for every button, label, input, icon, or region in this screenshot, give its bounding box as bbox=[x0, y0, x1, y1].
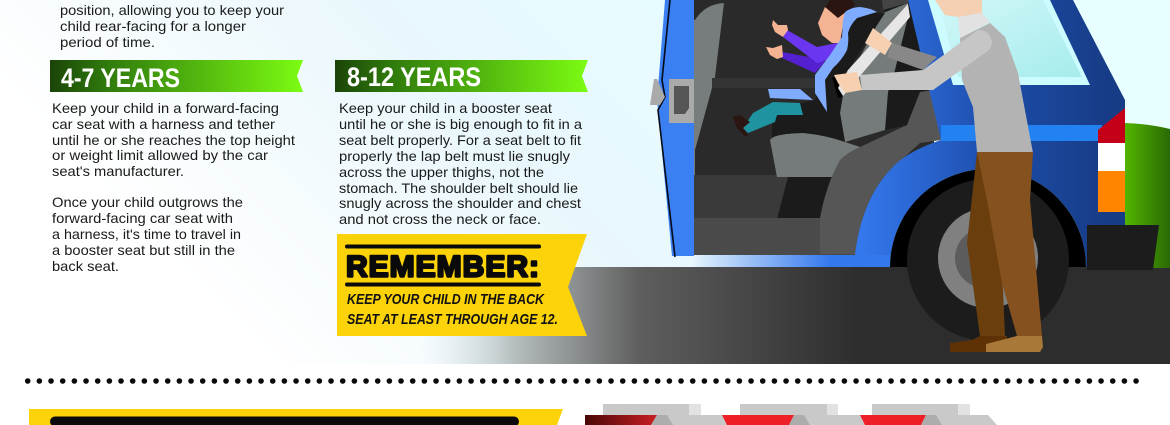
car floor bbox=[694, 175, 864, 255]
text: booster seat advice: seat belt properly. For a seat belt to fit bbox=[339, 133, 581, 148]
top text fragment: period of time. bbox=[60, 35, 155, 50]
text: forward-facing advice: Keep your child in a forward-facing bbox=[52, 101, 279, 116]
torso bbox=[960, 23, 1033, 153]
text: forward-facing advice: car seat with a harness and tether bbox=[52, 117, 275, 132]
vehicle body bbox=[585, 415, 997, 425]
top text fragment: position, allowing you to keep your bbox=[60, 3, 284, 18]
neck bbox=[935, 0, 982, 17]
text: booster seat advice: properly the lap belt must lie snugly bbox=[339, 149, 570, 164]
child bbox=[733, 0, 877, 137]
text: forward-facing advice bbox=[52, 101, 295, 179]
text: booster seat advice: until he or she is big enough to fit in a bbox=[339, 117, 582, 132]
far hand bbox=[865, 28, 892, 55]
wheel bbox=[890, 169, 1086, 341]
parent bbox=[834, 0, 1043, 352]
heading: 8-12 years bbox=[335, 60, 588, 92]
text: outgrowing the seat: back seat. bbox=[52, 259, 119, 274]
text: outgrowing the seat: forward-facing car seat with bbox=[52, 211, 233, 226]
text: booster seat advice: snugly across the shoulder and chest bbox=[339, 196, 581, 211]
top text fragment: child rear-facing for a longer bbox=[60, 19, 246, 34]
hair bbox=[825, 0, 855, 18]
illustration: parent buckling child in car bbox=[650, 0, 1170, 352]
text: forward-facing advice: seat's manufacturer. bbox=[52, 164, 184, 179]
car interior bbox=[694, 0, 934, 218]
roof racks bbox=[603, 404, 970, 415]
lap padding bbox=[768, 89, 813, 100]
door sill bbox=[694, 255, 890, 267]
interior bar bbox=[712, 78, 822, 88]
heading: 4-7 years: 4-7 YEARS bbox=[61, 63, 180, 93]
child legs bbox=[743, 102, 803, 133]
road bbox=[420, 267, 1170, 364]
seat back bbox=[840, 3, 908, 142]
interior pillar bbox=[694, 3, 724, 175]
seat cushion bbox=[770, 133, 860, 177]
grey wedges bbox=[651, 415, 942, 425]
text: forward-facing advice: until he or she reaches the top height bbox=[52, 133, 295, 148]
front shoe bbox=[986, 336, 1043, 352]
top text fragment bbox=[60, 3, 284, 50]
far arm bbox=[887, 43, 937, 70]
green bush bbox=[1125, 123, 1170, 268]
back shoe bbox=[950, 336, 1007, 352]
text: booster seat advice: Keep your child in a booster seat bbox=[339, 101, 552, 116]
upper arm bbox=[783, 30, 842, 63]
head bbox=[818, 7, 845, 43]
child shoe bbox=[733, 115, 750, 137]
text: booster seat advice: and not cross the neck or face. bbox=[339, 212, 541, 227]
text: outgrowing the seat bbox=[52, 195, 243, 274]
seat belt bbox=[832, 4, 910, 98]
near arm bbox=[860, 30, 992, 90]
car pillar and body bbox=[855, 0, 1125, 267]
callout: remember: SEAT AT LEAST THROUGH AGE 12. bbox=[347, 311, 558, 328]
text: outgrowing the seat: Once your child outgrows the bbox=[52, 195, 243, 210]
heading: 4-7 years bbox=[50, 60, 303, 93]
rear window bbox=[928, 0, 1090, 85]
child seat shell bbox=[772, 13, 885, 142]
callout: remember: REMEMBER: bbox=[346, 250, 539, 284]
collar bbox=[958, 13, 990, 38]
callout: remember bbox=[337, 234, 587, 336]
car seat bbox=[770, 3, 908, 177]
text: booster seat advice bbox=[339, 101, 582, 227]
callout: remember: KEEP YOUR CHILD IN THE BACK bbox=[347, 291, 545, 308]
heading: 8-12 years: 8-12 YEARS bbox=[347, 62, 481, 92]
text: booster seat advice: across the upper thighs, not the bbox=[339, 165, 544, 180]
back leg bbox=[967, 152, 1005, 336]
fender inner bbox=[820, 90, 941, 254]
headrest top bbox=[882, 0, 908, 10]
next section vehicle illustration bbox=[585, 404, 997, 425]
hands bbox=[766, 20, 788, 59]
next section banner bbox=[29, 409, 563, 425]
text: forward-facing advice: or weight limit allowed by the car bbox=[52, 148, 268, 163]
body stripe bbox=[941, 125, 1102, 141]
red panels bbox=[585, 415, 926, 425]
front leg bbox=[977, 152, 1042, 336]
bumper bbox=[1087, 225, 1159, 270]
text: booster seat advice: stomach. The shoulder belt should lie bbox=[339, 181, 578, 196]
lower arm bbox=[782, 52, 825, 73]
near hand bbox=[834, 72, 862, 93]
tail lights bbox=[1098, 108, 1125, 212]
text: outgrowing the seat: a booster seat but still in the bbox=[52, 243, 235, 258]
car door bbox=[650, 0, 694, 257]
dark rear panel bbox=[882, 0, 934, 130]
text: outgrowing the seat: a harness, it's time to travel in bbox=[52, 227, 241, 242]
dotted divider bbox=[28, 378, 1138, 384]
harness padding bbox=[815, 7, 877, 112]
